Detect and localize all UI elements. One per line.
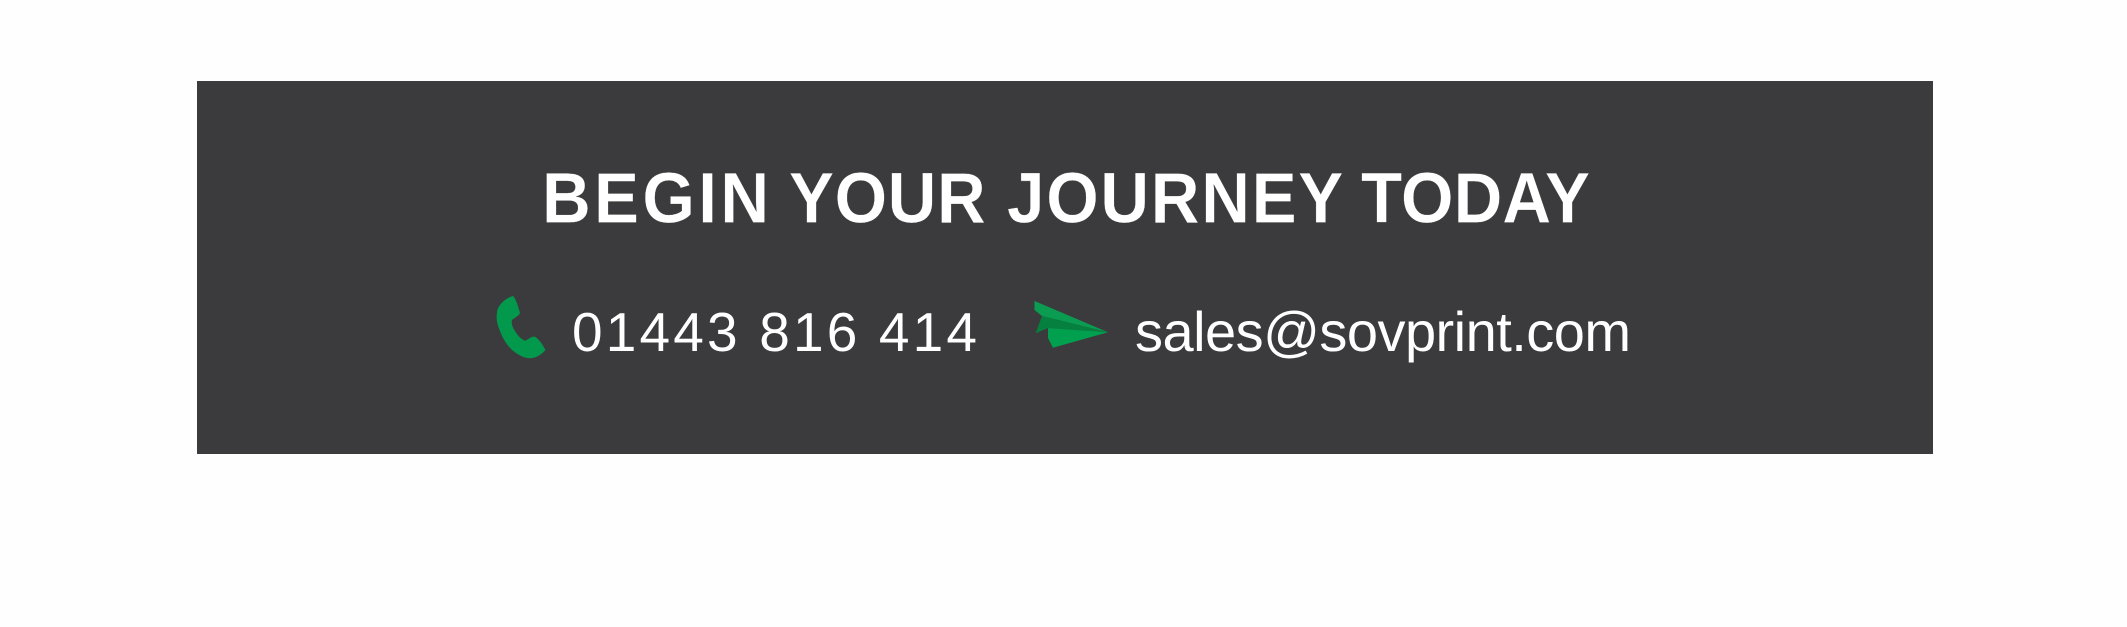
phone number: 01443 816 414	[572, 301, 977, 363]
heading: TODAY	[1361, 158, 1590, 238]
heading: BEGIN	[542, 158, 769, 238]
heading: YOUR	[789, 158, 986, 238]
panel: dark banner	[197, 81, 1933, 454]
icon: phone	[497, 296, 545, 358]
heading: JOURNEY	[1007, 158, 1343, 238]
email address: sales@sovprint.com	[1135, 300, 1631, 363]
icon: paper plane	[1034, 301, 1108, 348]
heading	[542, 158, 1590, 238]
